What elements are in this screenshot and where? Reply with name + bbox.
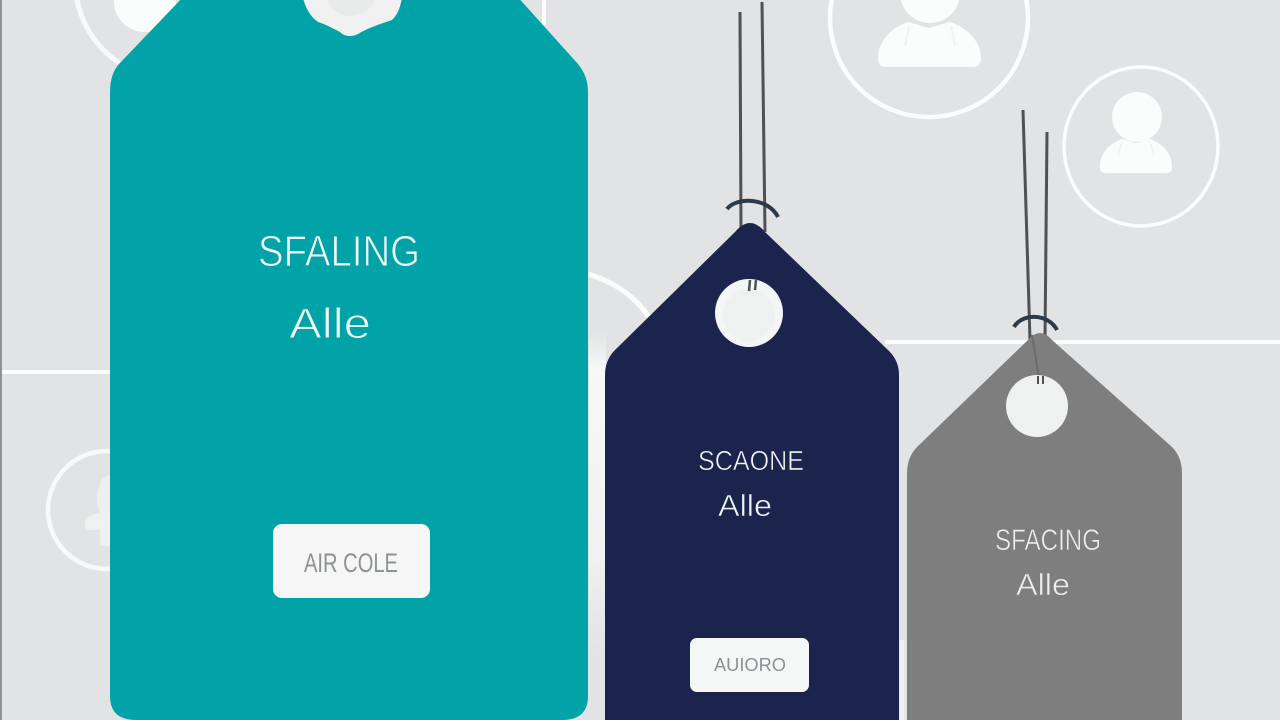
tag hole [715, 279, 783, 347]
icon: user circle right [1064, 67, 1218, 226]
tag subtitle: Alle [289, 300, 371, 348]
tag subtitle: Alle [718, 488, 772, 523]
button: AUIORO [714, 655, 786, 675]
tag subtitle: Alle [1016, 567, 1070, 602]
tag title: SCAONE [698, 445, 804, 476]
icon: user circle lower left [48, 451, 166, 569]
tag hole [1006, 375, 1068, 437]
button [690, 638, 809, 692]
tag: teal [110, 0, 588, 720]
string [1014, 110, 1057, 340]
icon: user circle top right [830, 0, 1028, 117]
tag: navy [605, 2, 899, 720]
button: AIR COLE [304, 548, 398, 578]
button [273, 524, 430, 598]
tag title: SFACING [995, 524, 1101, 557]
inner string [1032, 335, 1039, 378]
string [727, 2, 778, 232]
tag title: SFALING [258, 227, 420, 276]
tag hole [303, 0, 402, 36]
tag: grey [907, 110, 1182, 720]
icon: user circle top left [75, 0, 275, 80]
